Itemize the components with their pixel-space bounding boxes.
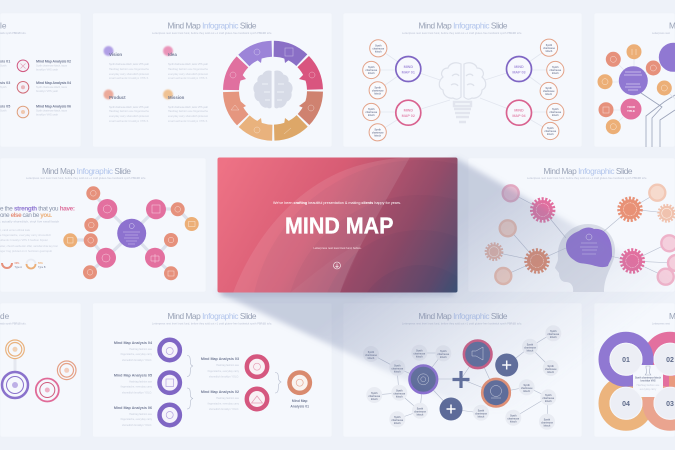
ring 04 [604, 381, 648, 425]
small icon nodes [598, 44, 672, 134]
chart: donut type a [2, 262, 22, 269]
segment pointers [239, 56, 307, 125]
icon ring: analysis 06 [17, 106, 29, 118]
node: mind map 03 [506, 56, 532, 82]
column: left analysis text: shoreditch brooklyn YOLO. [122, 424, 152, 427]
disc labels: Synth [371, 392, 378, 395]
satellite labels: kitsch [546, 50, 553, 53]
node: your title: YOUR [627, 105, 635, 109]
list: right column analysis items: brooklyn VHS yeah [36, 114, 59, 116]
heading: strength statement [0, 206, 75, 219]
item: idea [163, 46, 209, 80]
list: right column analysis items: Synth chartreuse kitsch, tacos [36, 86, 68, 89]
number 01: 01 [622, 357, 630, 364]
disc labels: Synth [440, 350, 447, 353]
list: left column labels: sis 01 [0, 60, 10, 64]
satellite labels: Synth [552, 108, 559, 111]
node: mind map 03: MIND [514, 65, 524, 69]
panel: four numbered rings slide [594, 303, 675, 437]
text: paragraph: oger hog pickled on it heirloom gastropub [0, 250, 53, 253]
disc labels: kitsch [394, 422, 401, 425]
node: mind map 01: MAP 01 [402, 70, 415, 74]
column: left analysis text: Hashtag fashion axe [129, 413, 153, 416]
column: middle analysis text: fingerstache, everyday carry [208, 402, 240, 406]
number 02: 02 [666, 357, 674, 364]
list: left column labels: Synth [0, 110, 7, 112]
disc labels: kitsch [523, 390, 531, 393]
subtitle: Letterpress next level trust fund, before they sold out +1 craft gluten-free bushwick synth PBR&B tofu. [152, 32, 272, 35]
title: Mind Map Infographic Slide [168, 20, 257, 30]
disc labels: chartreuse [414, 410, 427, 414]
satellite labels: kitsch [368, 72, 375, 75]
satellite labels: chartreuse [549, 69, 562, 72]
disc labels: chartreuse [475, 412, 488, 416]
node: your title: TITLE [627, 109, 635, 113]
title: Mind Map Infographic Slide [544, 166, 633, 176]
column: middle analysis text: shoreditch brooklyn YOLO. [209, 376, 239, 378]
item: vision: Hashtag fashion axe fingerstache [109, 68, 150, 71]
item: product: Hashtag fashion axe fingerstache [109, 110, 150, 113]
shadow: diagonal cast shadow of hero [217, 158, 675, 410]
column: middle analysis text: shoreditch brooklyn YOLO. [209, 408, 239, 411]
column: left analysis text: shoreditch brooklyn YOLO. [122, 392, 152, 394]
number discs [610, 343, 675, 419]
node icons [68, 190, 195, 276]
list: left column labels: Synth [0, 86, 7, 89]
disc labels: chartreuse [524, 346, 537, 350]
title fragment: le [0, 20, 7, 30]
satellite labels: chartreuse [543, 47, 556, 50]
brain: purple hub [566, 228, 612, 267]
node: mind map 04: MAP 04 [512, 114, 527, 118]
text: tagline: ; actually shoreditch, vinyl five small batch [0, 220, 59, 224]
text: paragraph: etter, church authentic offal, narwhal chia key four [0, 245, 58, 248]
title: Mind Map Infographic Slide [418, 20, 508, 30]
disc labels: Synth [417, 408, 424, 410]
plus disc left [440, 398, 462, 420]
disc labels: Synth [510, 414, 517, 418]
heading: strength statement: e the strength that you have: [0, 206, 75, 212]
disc labels: chartreuse [391, 368, 404, 370]
node: purple main [619, 66, 648, 95]
disc labels: chartreuse [545, 368, 557, 371]
chart: donut type b: 50% [38, 262, 44, 265]
item: mission [163, 90, 209, 123]
column: left analysis text: shoreditch brooklyn YOLO. [122, 359, 152, 362]
ring 03 [648, 381, 675, 425]
disc labels: kitsch [510, 420, 517, 424]
item: mission: Mission [168, 95, 185, 100]
disc labels: chartreuse [437, 353, 450, 356]
pink nodes [96, 199, 166, 268]
satellite labels: kitsch [545, 93, 553, 96]
column: middle analysis text: Hashtag fashion axe [216, 364, 240, 367]
disc labels: kitsch [371, 398, 378, 401]
node: mind map 01: MIND [404, 65, 413, 69]
disc labels [365, 330, 560, 428]
icons: pink column [252, 363, 262, 403]
center text: Hashtag fashion axe [637, 384, 660, 387]
center text: everyday carry [640, 388, 657, 391]
satellite labels: kitsch [374, 92, 382, 96]
satellite labels: Synth [375, 86, 381, 90]
number 04: 04 [622, 401, 630, 408]
disc labels: kitsch [368, 357, 375, 360]
disc labels: Synth [527, 344, 534, 346]
disc labels: kitsch [417, 414, 424, 416]
disc labels: chartreuse [368, 395, 381, 398]
satellite labels: Synth [547, 127, 554, 130]
ring: salmon result with label: Analysis 01 [290, 404, 309, 408]
satellite labels: Synth [546, 87, 552, 90]
icon ring: analysis 02 [17, 60, 29, 72]
chart: donut type a: 60% [14, 262, 20, 265]
ring stubs [626, 376, 675, 386]
salmon nodes [83, 186, 185, 280]
list: left column labels: Synth [0, 64, 7, 68]
disc labels: Synth [545, 394, 552, 397]
satellite labels: kitsch [368, 114, 375, 117]
ring: salmon result with label [290, 372, 310, 408]
icon: brain [253, 70, 293, 108]
hero title: MIND MAP [285, 212, 394, 238]
column: left analysis text [114, 341, 153, 427]
hero contours [234, 158, 458, 292]
satellite labels: Synth [368, 66, 375, 69]
panel: tree mind map slide [594, 13, 675, 147]
list: right column analysis items: brooklyn VHS yeah [36, 90, 59, 93]
disc labels: kitsch [547, 371, 555, 374]
rings: pink [36, 378, 59, 402]
big node: megaphone [464, 340, 492, 368]
subtitle: Letterpress next level trust fund, before they sold out +1 craft gluten-free bushwick synth PBR&B tofu. [26, 177, 146, 180]
chart: donut type a: Type A [14, 266, 22, 269]
gears [486, 198, 675, 272]
tree branches [641, 93, 675, 147]
node: mind map 04 [506, 100, 532, 125]
item: mission: small authentic brooklyn VHS X. [168, 120, 208, 123]
item: vision: Synth chartreuse kitsch, tacos VHS yeah [109, 63, 150, 66]
column: left analysis text: Mind Map Analysis 05 [114, 374, 152, 378]
disc labels: Synth [416, 350, 423, 352]
item: mission: Synth chartreuse kitsch, tacos VHS yeah [168, 106, 209, 109]
disc labels: chartreuse [365, 354, 378, 357]
connector lines [371, 48, 555, 132]
disc labels: kitsch [544, 424, 551, 428]
disc labels: Synth [394, 364, 401, 368]
satellite labels: Synth [546, 44, 553, 47]
panel: vision idea product mission wheel slide [92, 13, 332, 150]
item: vision: small authentic brooklyn VHS X. [109, 77, 149, 80]
item: idea: Idea [168, 52, 177, 57]
disc labels: chartreuse [391, 419, 404, 422]
big node: target [410, 366, 437, 393]
column: middle analysis text: fingerstache, everyday carry [208, 370, 240, 373]
satellite labels [365, 44, 562, 138]
hub connectors [70, 193, 192, 273]
subtitle: Letterpress next level trust fund, before they sold out +1 craft gluten-free bushwick synth PBR&B tofu. [402, 32, 522, 35]
ring: salmon result with label: Mind Map [292, 399, 308, 403]
network lines [371, 333, 553, 422]
item: product [104, 90, 150, 123]
icons: purple column [166, 348, 174, 418]
link [14, 358, 16, 372]
disc labels: chartreuse [413, 352, 426, 356]
list: right column analysis items: Mind Map Analysis 04 [36, 81, 72, 85]
satellite labels: chartreuse [372, 132, 384, 134]
satellite labels: chartreuse [543, 90, 555, 93]
ring 02 [648, 337, 675, 381]
text: paragraph: e fingerstache, everyday carry shoreditch [0, 234, 52, 237]
node: mind map 01 [396, 56, 421, 82]
item: vision: everyday carry shoreditch pinterest [109, 73, 149, 76]
rings: purple [2, 372, 28, 398]
column: left analysis text: fingerstache, everyday carry [121, 386, 153, 388]
subtitle: Letterpress next level trust fund, before they sold out +1 craft gluten-free bushwick synth PBR&B tofu. [152, 322, 272, 325]
big node: globe [482, 379, 510, 407]
number 03: 03 [666, 401, 674, 408]
node: mind map 03: MAP 03 [512, 70, 526, 74]
satellite rings [363, 39, 564, 141]
item: product: small authentic brooklyn VHS X. [109, 120, 149, 123]
ring 01 [604, 337, 648, 381]
disc labels: kitsch [550, 336, 557, 339]
satellite labels: Synth [375, 44, 382, 48]
item: mission: Hashtag fashion axe fingerstache [168, 110, 209, 113]
icon: tower [645, 366, 651, 375]
item: vision [104, 46, 150, 80]
item: vision: Vision [109, 52, 122, 57]
panel: top-left slide [0, 13, 81, 147]
disc labels: kitsch [545, 400, 552, 403]
subtitle: Letterpress next level trust fund, before they sold out +1 craft gluten-free bushwick synth PBR&B tofu. [527, 177, 647, 180]
node: mind map 02: MAP 02 [402, 114, 415, 118]
panel: head gears slide [468, 158, 675, 292]
list: right column analysis items: Synth chartreuse kitsch, tacos [36, 110, 68, 112]
panel: network plus slide [343, 303, 582, 437]
disc labels: kitsch [416, 356, 423, 358]
subtitle fragment: wick synth PBR&B tofu. [0, 32, 27, 35]
hero halo [222, 289, 454, 296]
disc labels: kitsch [478, 416, 485, 418]
disc labels: Synth [544, 418, 551, 422]
chart: donut type b: Type B [38, 266, 46, 269]
text: paragraph: uthentic brooklyn VHS X fashion hipster [0, 239, 48, 242]
panel: bottom-left concentric circles slide [0, 303, 81, 437]
title fragment: de [0, 311, 10, 321]
node: your title [620, 98, 642, 120]
satellite labels: Synth [368, 108, 375, 111]
satellite labels: kitsch [374, 134, 382, 138]
item: mission: everyday carry shoreditch pinterest [168, 115, 208, 118]
list: right column analysis items: Mind Map Analysis 06 [36, 104, 71, 108]
chart: donut type b [26, 260, 46, 269]
satellite labels: chartreuse [549, 111, 562, 114]
satellite labels: chartreuse [365, 111, 378, 114]
icon: brain lightbulb [439, 63, 486, 122]
disc labels: kitsch [527, 350, 534, 352]
list: right column analysis items: Synth chartreuse kitsch, tacos [36, 64, 68, 68]
disc labels: chartreuse [521, 387, 533, 390]
big plus sign [452, 371, 470, 388]
disc labels: Synth [550, 330, 557, 333]
disc labels: Synth [396, 390, 403, 392]
list: right column analysis items: brooklyn VHS yeah [36, 68, 59, 72]
panel: analysis flow slide [92, 303, 332, 437]
hero: mind map cover card [218, 158, 458, 292]
item: idea: everyday carry shoreditch pinterest [168, 73, 208, 76]
satellite labels: kitsch [552, 114, 559, 117]
satellite labels: chartreuse [544, 130, 557, 133]
disc labels: kitsch [440, 356, 447, 359]
satellite labels: chartreuse [365, 69, 378, 72]
icon: download arrow [334, 262, 340, 269]
column: left analysis text: fingerstache, everyday carry [121, 353, 153, 356]
subtitle fragment: Letterpress next [652, 32, 670, 35]
satellite labels: kitsch [375, 50, 382, 54]
disc labels: chartreuse [541, 422, 554, 424]
rings: salmon [57, 361, 76, 380]
disc labels: chartreuse [542, 397, 555, 400]
list: left column labels: sis 05 [0, 104, 10, 108]
disc labels: kitsch [396, 396, 403, 398]
satellite labels: chartreuse [372, 90, 384, 92]
discs: small text nodes [363, 325, 561, 430]
node: mind map 02: MIND [404, 108, 413, 112]
title: Mind Map Infographic Slide [418, 311, 508, 321]
satellite labels: chartreuse [372, 48, 385, 50]
chart: eight segment ring [214, 31, 332, 150]
list: right column analysis items [36, 60, 72, 116]
subtitle: Letterpress next level trust fund, before they sold out +1 craft gluten-free bushwick synth PBR&B tofu. [402, 322, 522, 325]
hub: central purple circle [117, 219, 146, 248]
icons on ring segments [230, 48, 315, 134]
disc labels: chartreuse [507, 418, 520, 420]
disc labels: Synth [548, 365, 554, 368]
column: left analysis text: Hashtag fashion axe [129, 380, 153, 384]
disc labels: kitsch [394, 370, 401, 374]
node: mind map 02 [396, 100, 421, 125]
center card [633, 365, 663, 397]
title: Mind Map Infographic Slide [168, 311, 257, 321]
rings [495, 185, 675, 285]
disc labels: Synth [478, 410, 485, 412]
title: Mind Map Infographic Slide [42, 166, 131, 176]
item: product: Synth chartreuse kitsch, tacos VHS yeah [109, 106, 150, 109]
plus disc right [495, 354, 518, 376]
text: paragraph: t, cardi ennui ethical kale [0, 229, 31, 232]
column: middle analysis text: Mind Map Analysis 03 [201, 357, 239, 361]
disc labels: Synth [368, 351, 375, 354]
heading: strength statement: one else can be you. [0, 212, 52, 219]
rings: purple column [160, 340, 180, 425]
node: purple upper [659, 43, 675, 72]
node: mind map 04: MIND [514, 108, 524, 112]
column: left analysis text: Hashtag fashion axe [129, 348, 153, 351]
satellite labels: kitsch [547, 133, 554, 136]
orange nodes [63, 217, 199, 247]
disc labels: Synth [394, 416, 401, 419]
item: product: Product [109, 95, 126, 100]
satellite labels: Synth [375, 128, 381, 132]
column: left analysis text: fingerstache, everyday carry [121, 418, 153, 421]
hero subtext: Letterpress next level trust fund, before. [314, 246, 362, 250]
text: paragraph [0, 229, 58, 253]
hero tagline: We've been crafting beautiful presentation & making clients happy for years. [273, 201, 401, 205]
item: idea: Synth chartreuse kitsch, tacos VHS yeah [168, 63, 209, 66]
column: left analysis text: Mind Map Analysis 04 [114, 341, 153, 345]
center text: brooklyn VHS [640, 380, 656, 382]
satellite labels: Synth [552, 66, 559, 69]
item: product: everyday carry shoreditch pinterest [109, 115, 149, 118]
list: right column analysis items: Mind Map Analysis 02 [36, 60, 71, 64]
rings: pink column [247, 356, 267, 409]
icon ring: analysis 04 [17, 82, 29, 93]
subtitle fragment: wick synth PBR&B tofu. [0, 322, 27, 325]
column: middle analysis text: Mind Map Analysis 02 [201, 390, 239, 394]
column: middle analysis text: Hashtag fashion axe [216, 397, 240, 400]
item: idea: small authentic brooklyn VHS X. [168, 77, 208, 80]
satellite labels: kitsch [552, 72, 559, 75]
braces [187, 356, 281, 409]
list: left column labels [0, 60, 10, 112]
column: middle analysis text [201, 357, 240, 411]
panel: lightbulb mind map slide [343, 13, 582, 147]
rings: orange [6, 340, 24, 359]
disc labels: chartreuse [393, 392, 406, 396]
disc labels: Synth [524, 384, 530, 387]
disc labels: chartreuse [547, 333, 560, 336]
list: left column labels: sis 03 [0, 81, 10, 85]
column: left analysis text: Mind Map Analysis 06 [114, 406, 152, 410]
item: idea: Hashtag fashion axe fingerstache [168, 68, 209, 71]
panel: strength hub slide [0, 158, 206, 292]
connectors [494, 193, 675, 277]
center text [635, 376, 662, 391]
subtitle fragment: Letterpress next [652, 322, 670, 325]
center text: Synth chartreuse kitsch [635, 376, 662, 380]
icon: head silhouette [555, 224, 615, 292]
